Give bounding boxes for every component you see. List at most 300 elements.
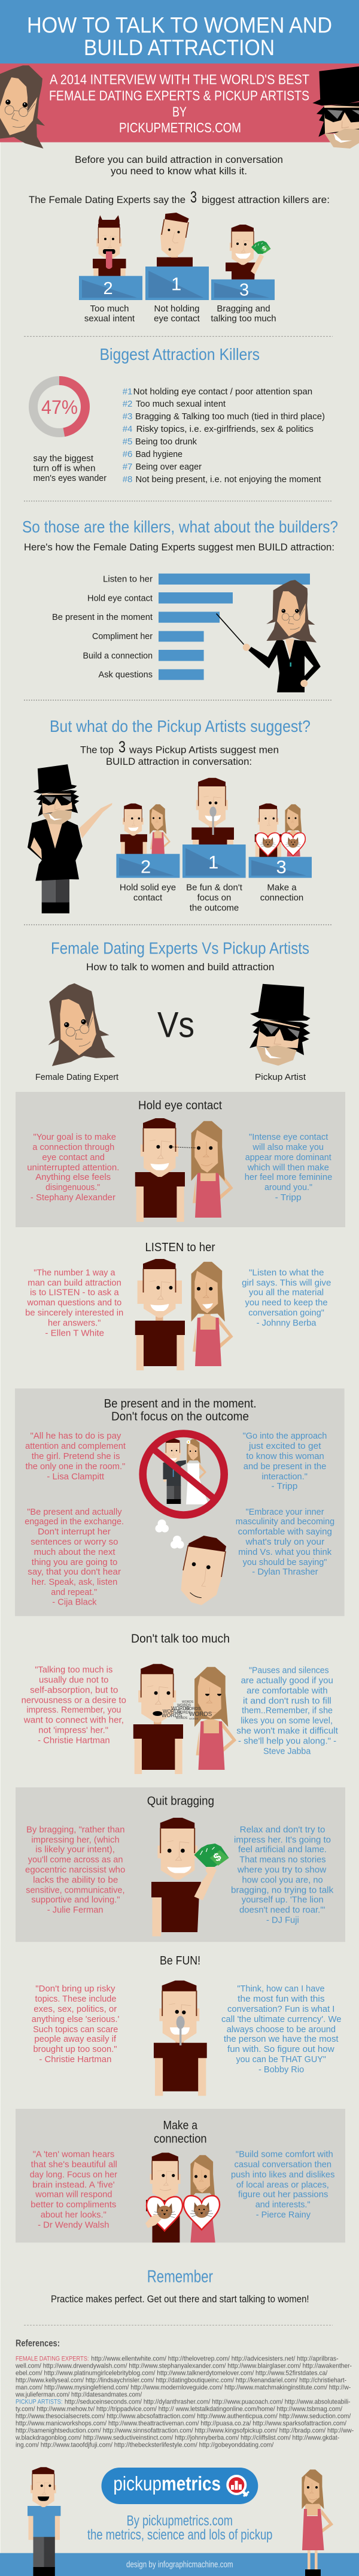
podium block 2: 2	[141, 856, 151, 877]
quote: DJ Fuji: yourself up. 'The lion	[242, 1894, 324, 1905]
podium block 1	[182, 844, 246, 878]
tagline: By pickupmetrics.com	[127, 2513, 233, 2529]
header: subtitle band: PICKUPMETRICS.COM	[119, 120, 241, 135]
quote: Johnny Berba	[242, 1267, 331, 1328]
icon: word cloud: WORDS	[185, 1707, 201, 1711]
quote: Christie Hartman: usually due not to	[39, 1675, 108, 1685]
podium labels: sexual intent	[84, 314, 135, 324]
podium block 3	[249, 856, 312, 878]
quote: Tripp: will also make you	[252, 1142, 324, 1152]
quote: Bobby Rio: call 'the ultimate currency'. We	[221, 2014, 341, 2024]
icon: couple holding cat hearts	[145, 2153, 220, 2242]
icon: thought bubbles	[156, 1519, 184, 1549]
quote: Cija Black: her. Speak, ask, listen	[32, 1577, 117, 1587]
icon: word cloud: WORDS	[176, 1717, 188, 1720]
donut caption: men's eyes wander	[34, 473, 107, 483]
quote: Steve Jabba: are actually good if you	[241, 1676, 333, 1686]
quote: Julie Ferman: By bragging, "rather than	[26, 1824, 124, 1835]
quote: Dr Wendy Walsh: better to compliments	[31, 2199, 116, 2209]
heading: 3 biggest killers: 3	[190, 188, 197, 206]
icon: bragging man with cash	[151, 1818, 229, 1936]
intro text: you need to know what kills it.	[111, 165, 247, 177]
quote: Bobby Rio: "Think, how can I have	[237, 1984, 325, 1994]
quote: Cija Black: - Cija Black	[52, 1597, 97, 1608]
quote: Cija Black: "Be present and actually	[27, 1507, 122, 1517]
podium block 3	[211, 279, 275, 300]
icon: female dating expert head in header	[0, 57, 68, 157]
logo: pickupmetrics	[102, 2468, 258, 2504]
ranked list of attraction killers: Bad hygiene	[135, 449, 182, 459]
quote: Dylan Thrasher: you should be saying"	[243, 1557, 327, 1567]
podium labels: eye contact	[154, 314, 200, 324]
panel heading: Be present and in the moment.	[104, 1397, 257, 1410]
icon: couple with cat hearts	[255, 804, 306, 861]
panel: be present	[15, 1388, 345, 1616]
quote: Johnny Berba: you need to keep the	[245, 1298, 328, 1308]
quote: DJ Fuji: doesn't need to roar.'"	[239, 1905, 325, 1915]
podium labels	[84, 304, 276, 324]
header: subtitle band: A 2014 INTERVIEW WITH THE WORLD'S BEST	[50, 72, 309, 87]
podium block 3: 3	[276, 856, 287, 877]
intro text: Before you can build attraction in conversation	[75, 154, 283, 165]
quote: Pierce Rainy: figure out her passions	[238, 2189, 328, 2199]
ranked list of attraction killers: #1	[123, 387, 132, 396]
quote: Johnny Berba: "Listen to what the	[249, 1267, 324, 1278]
heading: experts vs pickup artists: How to talk to women and build attraction	[86, 961, 274, 973]
quote: Stephany Alexander: uninterrupted attention.	[27, 1163, 119, 1173]
references list: http://www.ellentwhite.com/ http://thelovetrep.com/ http://advicesisters.net/ http://aprilbras-	[91, 2356, 339, 2363]
podium labels: connection	[260, 893, 303, 903]
quote: Julie Ferman: impressing her, (which	[31, 1835, 120, 1845]
quote: Christie Hartman: brought up too soon."	[34, 2044, 117, 2054]
podium labels: the outcome	[190, 903, 239, 913]
quote: Dr Wendy Walsh: "A 'ten' woman hears	[33, 2149, 114, 2159]
ranked list of attraction killers: #7	[123, 462, 132, 472]
ranked list of attraction killers: #3	[123, 411, 132, 422]
icon: word cloud: WORDS	[189, 1711, 212, 1718]
ranked list of attraction killers: Bragging & Talking too much (tied in third place)	[135, 411, 325, 422]
bar chart: how experts suggest building attraction: Listen to her	[103, 574, 153, 584]
heading: 3 biggest killers: biggest attraction killers are:	[202, 194, 330, 205]
quote: Christie Hartman: not 'impress' her."	[38, 1726, 108, 1736]
quote: Dr Wendy Walsh: that she's beautiful all	[31, 2159, 117, 2169]
ranked list of attraction killers: Too much sexual intent	[136, 399, 226, 409]
quote: DJ Fuji: Relax and don't try to	[240, 1824, 325, 1835]
heading: what pickup artists suggest: But what do the Pickup Artists suggest?	[50, 717, 311, 735]
section heading: Be FUN!	[160, 1954, 200, 1967]
references list: w.blackdragonblog.com/ http://www.seductiveinstinct.com/ http://johnnyberba.com/ http://cliffslist.com/ http://www.gkdat-	[15, 2435, 340, 2442]
quote: Tripp: around you."	[264, 1182, 312, 1192]
quote: Johnny Berba: you all the material	[249, 1288, 324, 1298]
podium block 2	[79, 276, 142, 300]
portrait captions: Female Dating Expert	[35, 1072, 119, 1082]
quote: Ellen T White	[25, 1267, 123, 1338]
icon: man with spoon	[154, 1981, 207, 2096]
quote: Christie Hartman: Such topics can scare	[33, 2024, 118, 2035]
quote: Julie Ferman: you'll come across as an	[28, 1854, 123, 1864]
quote: Dr Wendy Walsh	[30, 2149, 117, 2230]
portrait captions	[35, 1072, 306, 1082]
quote: Christie Hartman: people away easily if	[34, 2034, 117, 2044]
quote: DJ Fuji: impress her. It's going to	[234, 1835, 331, 1845]
icon: word cloud: WORDS	[182, 1700, 194, 1704]
panel heading: connection	[154, 2132, 207, 2145]
quote: Ellen T White: - Ellen T White	[45, 1328, 104, 1338]
quote: Christie Hartman: topics. These include	[35, 1994, 116, 2004]
quote: Stephany Alexander: disingenuous."	[45, 1182, 100, 1192]
header: title band	[0, 0, 359, 63]
panel: make a connection	[16, 2109, 345, 2242]
podium block 2	[116, 854, 180, 878]
quote: Tripp: "Intense eye contact	[249, 1132, 328, 1142]
section: don't talk too much	[22, 1633, 339, 1774]
quote: Pierce Rainy: and interests."	[255, 2199, 311, 2209]
quote: Tripp	[245, 1132, 332, 1203]
panel: hold eye contact	[16, 1092, 345, 1227]
icon: pickup artist full figure	[28, 761, 112, 913]
ranked list of attraction killers	[123, 387, 325, 485]
podium: pickup artist suggestions	[116, 778, 312, 913]
ranked list of attraction killers: #2	[123, 399, 132, 409]
podium labels: Make a	[267, 883, 297, 893]
quote: Bobby Rio: - Bobby Rio	[258, 2065, 304, 2075]
quote: Ellen T White: is to LISTEN - to ask a	[30, 1288, 119, 1298]
quote: Ellen T White: woman questions and to	[27, 1298, 121, 1308]
quote: DJ Fuji: where you try to show	[237, 1864, 326, 1875]
icon: man and woman listening	[135, 1259, 233, 1370]
Vs label: Vs	[157, 1005, 194, 1045]
quote: Tripp: just excited to get	[248, 1441, 321, 1451]
heading: what pickup artists suggest: ways Pickup Artists suggest men	[129, 744, 279, 756]
quote: Dr Wendy Walsh: - Dr Wendy Walsh	[38, 2220, 109, 2230]
footer band	[0, 2553, 359, 2576]
quote: Ellen T White: "The number 1 way a	[34, 1267, 115, 1278]
heading: the builders	[22, 517, 338, 553]
icon: female dating expert head	[48, 983, 115, 1066]
quote: Cija Black: and repeat."	[51, 1587, 97, 1597]
quote: Stephany Alexander: a connection through	[32, 1142, 114, 1152]
icon: man and woman holding eye contact	[120, 804, 171, 861]
groom	[163, 1439, 186, 1504]
donut caption: turn off is when	[34, 464, 96, 474]
quote: Tripp: which will then make	[247, 1163, 329, 1173]
references list: http://www.manicworkshops.com/ http://www.theattractiveman.com/ http://puasa.co.za/ http://www.sparksofattraction.com/	[16, 2420, 347, 2427]
quote: Christie Hartman: impress. Remember, you	[26, 1705, 121, 1715]
ranked list of attraction killers: Risky topics, i.e. ex-girlfriends, sex & politics	[136, 424, 314, 434]
quote: Stephany Alexander: - Stephany Alexander	[31, 1192, 115, 1203]
panel: quit bragging	[16, 1787, 345, 1942]
ranked list of attraction killers: Not being present, i.e. not enjoying the moment	[135, 474, 321, 485]
ranked list of attraction killers: #5	[123, 437, 132, 447]
quote: Steve Jabba: - she'll help you along." -	[238, 1736, 336, 1746]
quote: DJ Fuji	[231, 1824, 334, 1925]
icon: woman in red dress	[302, 2469, 333, 2576]
quote: Julie Ferman: is likely your intent),	[35, 1844, 115, 1854]
references list: FEMALE DATING EXPERTS:	[16, 2356, 89, 2363]
quote: Christie Hartman: "Don't bring up risky	[35, 1984, 115, 1994]
icon: word cloud: WORDS	[177, 1704, 191, 1708]
quote: Christie Hartman	[32, 1984, 120, 2065]
quote: Christie Hartman: want to connect with her,	[23, 1715, 124, 1726]
icon: magnifier with bars	[227, 2476, 249, 2496]
quote: DJ Fuji: feel artificial and lame.	[238, 1844, 327, 1854]
icon: teacher woman with pointer	[217, 576, 327, 692]
references list: ebel.com/ http://www.platinumgirlcelebrityblog.com/ http://www.talknerdytomelover.com/ http://www.52firstdates.ca/	[16, 2370, 328, 2377]
icon: word cloud: WORDS	[189, 1717, 199, 1720]
intro text	[75, 154, 283, 177]
bar chart: how experts suggest building attraction: Ask questions	[98, 670, 153, 680]
quote: Dylan Thrasher: "Embrace your inner	[246, 1507, 324, 1517]
panel heading: Hold eye contact	[138, 1099, 222, 1112]
panel heading	[104, 1397, 257, 1424]
quote: Tripp: - Tripp	[275, 1192, 302, 1203]
donut chart: 47%: 47%	[41, 396, 78, 418]
quote: Ellen T White: man can build attraction	[28, 1278, 121, 1288]
ranked list of attraction killers: Being over eager	[135, 462, 202, 472]
podium block 1: 1	[171, 273, 181, 294]
quote: Bobby Rio: always choose to be around	[227, 2024, 336, 2035]
icon: man avoiding eye contact	[157, 213, 193, 270]
quote: Christie Hartman: nervousness or a desire to	[22, 1696, 126, 1706]
heading: experts vs pickup artists: Female Dating Experts Vs Pickup Artists	[51, 939, 309, 958]
quote: Pierce Rainy: "Build some comfort with	[236, 2149, 333, 2159]
quote: Ellen T White: her answers."	[48, 1318, 101, 1328]
quote: Cija Black: thing you are going to	[32, 1557, 117, 1567]
quote: Bobby Rio	[221, 1984, 341, 2075]
heading: what pickup artists suggest: 3	[118, 738, 126, 756]
quote: Julie Ferman	[25, 1824, 125, 1915]
quote: Cija Black: engaged in the exchange.	[25, 1516, 124, 1527]
ranked list of attraction killers: #4	[123, 424, 132, 434]
ranked list of attraction killers: Not holding eye contact / poor attention span	[133, 387, 312, 396]
quote: Tripp: appear more dominant	[245, 1152, 331, 1163]
quote: Johnny Berba: conversation going"	[248, 1308, 324, 1318]
icon: thoughtful man's head	[181, 1536, 226, 1605]
ranked list of attraction killers: #8	[123, 474, 132, 485]
quote: Christie Hartman: anything else 'serious.'	[32, 2014, 120, 2024]
heading: 3 biggest killers	[29, 188, 330, 206]
ranked list of attraction killers: Being too drunk	[135, 437, 197, 447]
quote: Pierce Rainy: push into likes and dislikes	[231, 2169, 334, 2180]
section: listen to her	[25, 1241, 331, 1370]
icon: word cloud: WORDS	[163, 1709, 181, 1714]
bar chart: how experts suggest building attraction: Hold eye contact	[87, 594, 153, 604]
references heading: References:	[16, 2339, 60, 2349]
panel heading: Don't focus on the outcome	[111, 1410, 249, 1424]
quote: Tripp	[243, 1431, 327, 1491]
quote: Christie Hartman	[22, 1665, 126, 1746]
icon: no wedding sign	[143, 1434, 224, 1515]
references list: ty.com/ http://www.mehow.tv/ http://trippadvice.com/ http:// www.letstalkdatingonline.com/home/ http://www.tsbmag.com/	[16, 2406, 343, 2413]
quote: Christie Hartman: - Christie Hartman	[39, 2054, 111, 2065]
bar chart: how experts suggest building attraction: Be present in the moment	[52, 612, 153, 622]
quote: Cija Black: Don't interrupt her	[38, 1527, 111, 1537]
icon: bragging man with cash	[226, 225, 270, 281]
icon: devil man with tongue	[93, 215, 126, 292]
quote: Bobby Rio: fun with. So figure out how	[227, 2044, 334, 2054]
bride	[186, 1439, 208, 1505]
quote: Steve Jabba: Steve Jabba	[263, 1746, 311, 1756]
panel heading: Quit bragging	[147, 1794, 214, 1808]
heading: the builders: Here's how the Female Dating Experts suggest men BUILD attraction:	[24, 541, 334, 553]
quote: Cija Black: say, that you don't hear	[28, 1567, 121, 1577]
references list: PICKUP ARTISTS:	[16, 2399, 62, 2406]
quote: Bobby Rio: you can be THAT GUY"	[236, 2054, 326, 2065]
icon: word cloud: WORDS	[177, 1711, 191, 1715]
quote: Dr Wendy Walsh: about her looks."	[41, 2209, 107, 2220]
quote: Stephany Alexander: Anything else feels	[35, 1172, 111, 1182]
heading: what pickup artists suggest	[50, 717, 311, 767]
icon: man talking too much and bored woman	[133, 1664, 236, 1774]
quote: Julie Ferman: lacks the ability to be	[33, 1875, 118, 1885]
quote: Dr Wendy Walsh: brain instead. A 'five'	[32, 2180, 115, 2190]
quote: Lisa Clampitt: the only one in the room."	[25, 1461, 125, 1472]
quote: Lisa Clampitt: "All he has to do is pay	[30, 1431, 121, 1441]
podium labels: Hold solid eye	[120, 883, 176, 893]
header: subtitle band	[0, 63, 359, 143]
quote: DJ Fuji: bragging, no trying to talk	[231, 1885, 334, 1895]
logo: pickupmetrics: pickup	[113, 2472, 162, 2495]
donut caption: say the biggest	[34, 453, 94, 464]
header: title band: HOW TO TALK TO WOMEN AND	[27, 13, 332, 37]
quote: Dylan Thrasher: - Dylan Thrasher	[252, 1567, 318, 1577]
logo: pickupmetrics: metrics	[162, 2472, 221, 2495]
quote: Tripp: interaction."	[261, 1472, 308, 1482]
quote: Tripp: "Go into the approach	[243, 1431, 327, 1441]
bar chart: how experts suggest building attraction: Compliment her	[92, 631, 153, 641]
icon: man in blue shirt	[28, 2467, 60, 2576]
section heading: Don't talk too much	[131, 1633, 230, 1646]
quote: Tripp: - Tripp	[272, 1481, 297, 1491]
section: be fun	[32, 1954, 342, 2096]
quote: Bobby Rio: conversation? Fun is what I	[227, 2004, 334, 2014]
quote: Julie Ferman: egocentric narcissist who	[25, 1864, 125, 1875]
heading: 3 biggest killers: The Female Dating Experts say the	[29, 194, 185, 205]
quote: Lisa Clampitt: attention and complement	[25, 1441, 126, 1451]
quote: DJ Fuji: how cool you are, no	[242, 1875, 323, 1885]
quote: Dr Wendy Walsh: day long. Focus on her	[30, 2169, 117, 2180]
icon: man and woman making eye contact	[135, 1118, 233, 1222]
quote: Steve Jabba: are comfortable with	[247, 1686, 328, 1696]
quote: Dylan Thrasher: comfortable with saying	[238, 1527, 332, 1537]
podium: attraction killers	[79, 213, 276, 324]
quote: Bobby Rio: the most fun with this	[238, 1994, 325, 2004]
quote: Steve Jabba: it and don't rush to fill	[243, 1696, 331, 1706]
podium block 1	[145, 267, 209, 300]
bar chart: how experts suggest building attraction	[52, 574, 310, 680]
podium labels: Not holding	[154, 304, 199, 314]
heading: biggest attraction killers: Biggest Attraction Killers	[99, 345, 260, 364]
quote: Dylan Thrasher: what's truly on your	[245, 1537, 324, 1547]
podium labels: contact	[133, 893, 163, 903]
quote: Christie Hartman: self-absorption, but to	[30, 1685, 118, 1696]
quote: Pierce Rainy	[231, 2149, 334, 2220]
quote: DJ Fuji: - DJ Fuji	[266, 1915, 299, 1925]
quote: Lisa Clampitt: the girl. Pretend she is	[32, 1451, 120, 1461]
references list	[15, 2356, 354, 2449]
remember section: Remember	[147, 2268, 213, 2287]
quote: Christie Hartman: "Talking too much is	[35, 1665, 112, 1675]
quote: Stephany Alexander	[27, 1132, 119, 1203]
quote: Cija Black: sentences or worry so	[31, 1537, 118, 1547]
podium labels	[120, 883, 303, 913]
header: subtitle band: FEMALE DATING EXPERTS & PICKUP ARTISTS	[49, 87, 309, 103]
quote: Steve Jabba	[236, 1666, 339, 1756]
quote: Julie Ferman: - Julie Ferman	[47, 1905, 104, 1915]
podium labels: focus on	[197, 893, 231, 903]
quote: Christie Hartman: - Christie Hartman	[38, 1736, 110, 1746]
podium labels: Too much	[90, 304, 129, 314]
quote: Johnny Berba: girl says. This will give	[242, 1278, 331, 1288]
panel heading	[154, 2119, 207, 2145]
podium labels: talking too much	[211, 314, 276, 324]
icon: pickup artist head in header	[306, 62, 359, 154]
quote: Dr Wendy Walsh: woman will respond	[35, 2189, 112, 2199]
heading: experts vs pickup artists	[51, 939, 309, 973]
header: subtitle band: BY	[172, 104, 187, 120]
bar chart: how experts suggest building attraction: Build a connection	[83, 650, 153, 661]
quote: Ellen T White: be sincerely interested in	[25, 1308, 123, 1318]
podium labels: Be fun & don't	[186, 883, 243, 893]
ranked list of attraction killers: #6	[123, 449, 132, 459]
quote: Pierce Rainy: of local areas or places,	[236, 2180, 329, 2190]
remember section	[51, 2268, 309, 2305]
tagline	[87, 2513, 272, 2543]
quote: DJ Fuji: That means no stories	[239, 1854, 325, 1864]
quote: Cija Black	[25, 1507, 124, 1608]
icon: man with spoon	[191, 778, 234, 870]
podium labels: Bragging and	[217, 304, 270, 314]
quote: Steve Jabba: "Pauses and silences	[249, 1666, 329, 1676]
quote: Stephany Alexander: "Your goal is to make	[34, 1132, 116, 1142]
quote: Bobby Rio: the person we have the most	[224, 2034, 339, 2044]
tagline: the metrics, science and lols of pickup	[87, 2527, 272, 2543]
quote: Lisa Clampitt: - Lisa Clampitt	[47, 1472, 105, 1482]
quote: Johnny Berba: - Johnny Berba	[257, 1318, 317, 1328]
quote: Dylan Thrasher: mind Vs. what you think	[238, 1547, 332, 1557]
quote: Cija Black: much about the next	[34, 1547, 115, 1557]
references list: ww.julieferman.com/ http://datesandmates.com/	[15, 2392, 142, 2399]
quote: Steve Jabba: she won't make it difficult	[236, 1726, 339, 1736]
quote: Dylan Thrasher: masculinity and becoming	[236, 1516, 334, 1527]
quote: Christie Hartman: exes, sex, politics, or	[34, 2004, 117, 2014]
quote: Dylan Thrasher	[236, 1507, 334, 1577]
quote: Steve Jabba: them..Remember, if she	[242, 1706, 333, 1716]
icon: pickup artist head	[250, 984, 311, 1065]
quote: Pierce Rainy: casual conversation then	[235, 2159, 331, 2169]
icon: word cloud: WORDS	[162, 1712, 182, 1718]
quote: Tripp: and be present in the	[244, 1461, 326, 1472]
donut chart: 47%	[34, 381, 85, 432]
references list: ing.com/ http://www.taoofdjfuji.com/ http://thebecksterlifestyle.com/ http://gobeyonddating.com/	[16, 2442, 274, 2449]
section heading: LISTEN to her	[145, 1241, 215, 1254]
quote: Pierce Rainy: - Pierce Rainy	[256, 2209, 311, 2220]
podium block 2: 2	[103, 279, 113, 298]
podium block 1: 1	[208, 852, 218, 873]
quote: Steve Jabba: likes you on some level,	[241, 1716, 333, 1726]
icon: word cloud	[162, 1700, 212, 1720]
quote: Lisa Clampitt	[25, 1431, 126, 1482]
podium block 3: 3	[239, 280, 249, 299]
quote: Stephany Alexander: eye contact and	[42, 1152, 105, 1163]
heading: what pickup artists suggest: The top	[80, 744, 114, 756]
heading: what pickup artists suggest: BUILD attraction in conversation:	[106, 756, 252, 767]
icon: word cloud: WORDS	[171, 1706, 190, 1711]
footer band: design by infographicmachine.com	[126, 2560, 233, 2570]
donut caption	[34, 453, 107, 483]
header: title band: BUILD ATTRACTION	[84, 35, 275, 60]
remember section: Practice makes perfect. Get out there and start talking to women!	[51, 2293, 309, 2305]
